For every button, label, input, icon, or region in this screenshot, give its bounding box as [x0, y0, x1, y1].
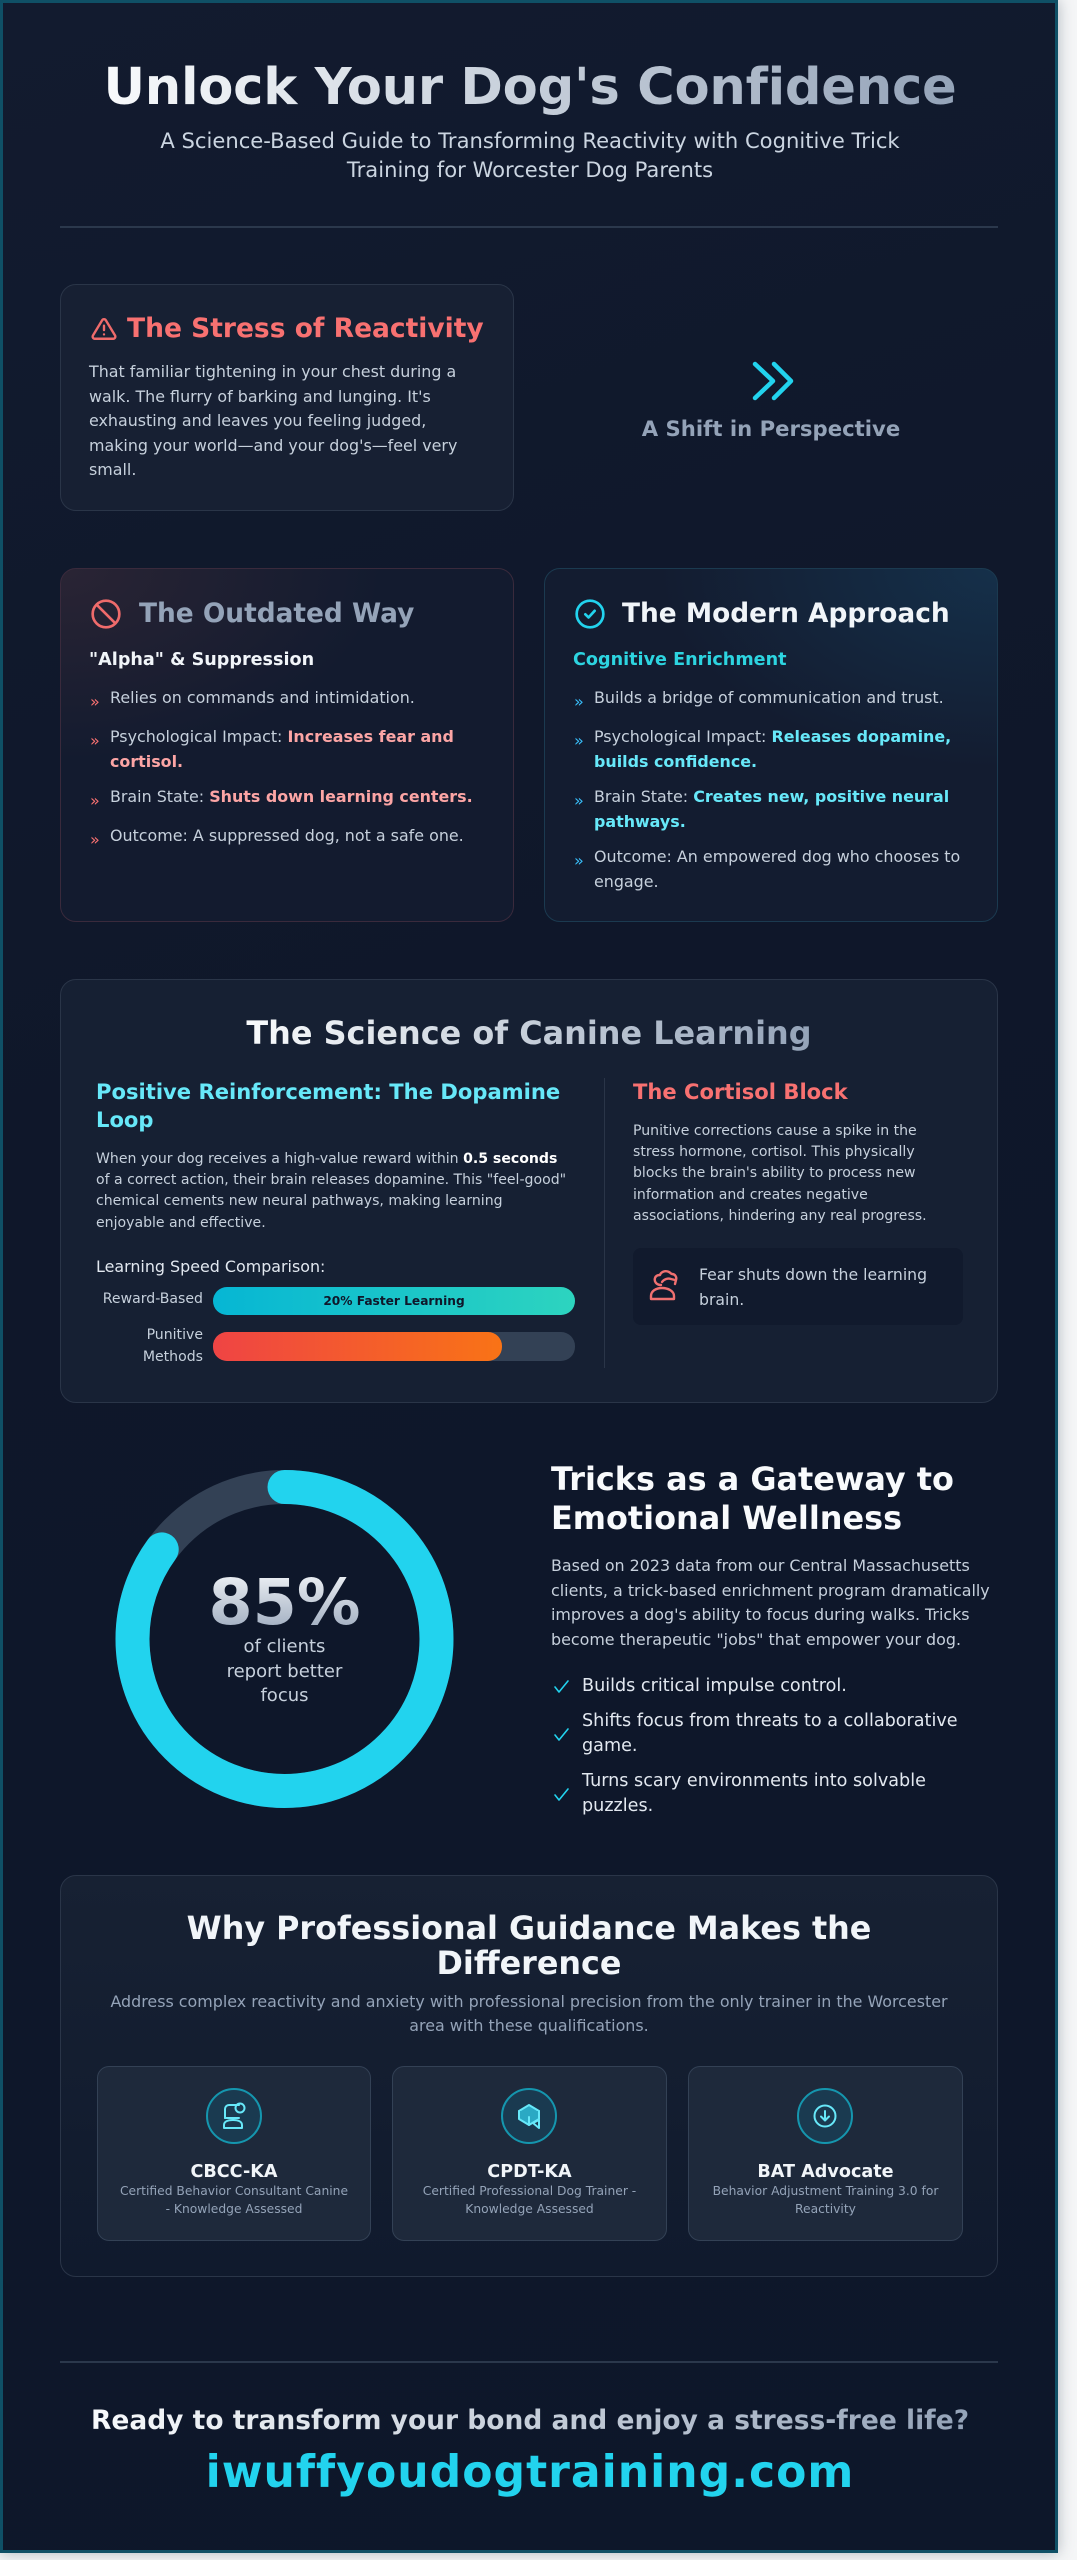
transition: a shift in perspective [642, 362, 900, 441]
description: Certified Behavior Consultant Canine [120, 2184, 348, 2198]
list [90, 688, 473, 849]
heading: Tricks as a Gateway to [551, 1460, 954, 1498]
chart: learning speed comparison [96, 1257, 575, 1364]
body text [88, 362, 457, 479]
callout [633, 1248, 963, 1325]
heading: The Modern Approach [622, 598, 950, 629]
subheading: "Alpha" & Suppression [89, 650, 314, 670]
subheading: Cognitive Enrichment [573, 650, 787, 670]
bullet row: Relies on commands and intimidation. [110, 688, 415, 707]
bar: reward-based: 20% Faster Learning [323, 1294, 465, 1308]
label: A Shift in Perspective [642, 416, 900, 441]
icon badge [501, 2088, 557, 2144]
bullet row: Outcome: An empowered dog who chooses to [594, 846, 960, 866]
left column text: of a correct action, their brain releases dopamine. This "feel-good" [96, 1172, 566, 1188]
callout text [699, 1265, 927, 1309]
heading: Why Professional Guidance Makes the [187, 1910, 871, 1947]
icon badge [797, 2088, 853, 2144]
heading: The Stress of Reactivity [127, 313, 484, 344]
credential: CBCC-KA [96, 2066, 371, 2241]
right column text: blocks the brain's ability to process new [633, 1165, 916, 1181]
list: » [90, 731, 100, 750]
body text: clients, a trick-based enrichment program dramatically [551, 1581, 990, 1600]
left column text: enjoyable and effective. [96, 1215, 266, 1231]
chart: 85% donut [116, 1470, 454, 1808]
icon: check [554, 1728, 569, 1741]
bullet row: Outcome: A suppressed dog, not a safe one. [110, 826, 464, 845]
left column heading: Loop [96, 1107, 154, 1132]
icon badge [206, 2088, 262, 2144]
icon: check circle [575, 599, 605, 629]
left column heading: Positive Reinforcement: The Dopamine [96, 1079, 560, 1104]
heading: Difference [437, 1945, 621, 1982]
label: reward-based: Reward-Based [103, 1291, 203, 1307]
credential: CPDT-KA [392, 2066, 666, 2241]
check item: Builds critical impulse control. [582, 1676, 847, 1696]
list: » [574, 791, 584, 810]
panel: the outdated way [60, 568, 514, 922]
heading [187, 1910, 871, 1982]
bullet row [90, 727, 454, 771]
check item: puzzles. [582, 1796, 653, 1816]
bullet row: builds confidence. [594, 752, 757, 771]
icon: check [554, 1788, 569, 1801]
donut caption: of clients [244, 1636, 325, 1657]
right column text: Punitive corrections cause a spike in the [633, 1123, 917, 1139]
icon: warning triangle [91, 318, 117, 340]
heading: The Outdated Way [139, 598, 414, 629]
list: » [90, 791, 100, 810]
callout text: Fear shuts down the learning [699, 1265, 927, 1284]
description: Knowledge Assessed [465, 2202, 594, 2216]
bullet row: Psychological Impact: Increases fear and [110, 727, 454, 746]
chart title: Learning Speed Comparison: [96, 1257, 325, 1276]
list: » [90, 692, 100, 711]
body text [551, 1556, 990, 1649]
list: » [574, 850, 584, 870]
left column text: chemical cements new neural pathways, making learning [96, 1193, 503, 1209]
subtitle: Training for Worcester Dog Parents [347, 156, 713, 182]
label: punitive methods: Methods [143, 1348, 203, 1364]
left column text: When your dog receives a high-value reward within 0.5 seconds [96, 1151, 557, 1167]
check item [582, 1771, 926, 1816]
icon: prohibited [91, 599, 121, 629]
bullet row: Builds a bridge of communication and trust. [594, 688, 944, 707]
icon: box mark [516, 2101, 544, 2131]
bullet row: Psychological Impact: Releases dopamine, [594, 727, 951, 746]
icon: check [554, 1680, 569, 1693]
bullet row: Brain State: Shuts down learning centers. [110, 787, 473, 806]
description [98, 2183, 370, 2218]
panel: the science of canine learning [60, 979, 998, 1403]
big number: 85% [208, 1565, 360, 1639]
body text: walk. The flurry of barking and lunging. It's [89, 386, 431, 406]
bullet row [574, 846, 960, 890]
donut caption: report better [227, 1661, 342, 1682]
check item: Turns scary environments into solvable [582, 1771, 926, 1791]
bullet row: engage. [594, 872, 659, 890]
body text: That familiar tightening in your chest during a [89, 362, 456, 381]
heading: The Science of Canine Learning [246, 1014, 812, 1052]
left column heading [96, 1079, 560, 1132]
bullet row: pathways. [594, 812, 686, 831]
bullet row [574, 727, 951, 771]
right column text: associations, hindering any real progress. [633, 1208, 927, 1224]
body text: become therapeutic "jobs" that empower your dog. [551, 1630, 961, 1649]
body text: small. [89, 460, 136, 479]
name: BAT Advocate [757, 2162, 894, 2182]
right column text [633, 1123, 927, 1224]
description: - Knowledge Assessed [166, 2202, 302, 2216]
bar fill [213, 1332, 502, 1361]
donut caption [227, 1636, 342, 1706]
description: Behavior Adjustment Training 3.0 for [713, 2184, 938, 2198]
panel: the stress of reactivity [60, 284, 514, 511]
name: CBCC-KA [190, 2162, 278, 2182]
title: Unlock Your Dog's Confidence [103, 57, 957, 117]
body text: Based on 2023 data from our Central Massachusetts [551, 1556, 970, 1575]
bar: punitive methods [213, 1332, 575, 1361]
panel: why professional guidance [60, 1875, 998, 2277]
callout text: brain. [699, 1290, 744, 1309]
icon: user mark [220, 2101, 246, 2131]
list: » [90, 830, 100, 849]
subtitle: A Science-Based Guide to Transforming Reactivity with Cognitive Trick [160, 128, 900, 153]
right column text: information and creates negative [633, 1187, 868, 1203]
heading [551, 1460, 954, 1537]
right column text: stress hormone, cortisol. This physically [633, 1144, 915, 1160]
credential: BAT Advocate [688, 2066, 962, 2241]
bar: reward-based [213, 1287, 575, 1315]
icon: double chevron [752, 362, 794, 400]
bullet row [574, 787, 949, 831]
description [689, 2183, 962, 2218]
call to action: Ready to transform your bond and enjoy a stress-free life? [91, 2405, 969, 2436]
body text: exhausting and leaves you feeling judged, [89, 411, 426, 430]
heading: Emotional Wellness [551, 1499, 902, 1537]
name: CPDT-KA [487, 2162, 572, 2182]
check item: game. [582, 1736, 638, 1756]
icon: brain [650, 1270, 678, 1300]
body text: improves a dog's ability to focus during walks. Tricks [551, 1605, 970, 1624]
donut ring [116, 1470, 454, 1808]
right column heading: The Cortisol Block [633, 1079, 848, 1104]
body text: making your world—and your dog's—feel very [89, 436, 457, 454]
label: punitive methods: Punitive [147, 1327, 203, 1343]
list: » [574, 692, 584, 711]
section: tricks as a gateway [551, 1460, 990, 1816]
list [574, 688, 960, 890]
bullet row: Brain State: Creates new, positive neural [594, 787, 949, 806]
subheading: area with these qualifications. [409, 2016, 649, 2035]
description: Certified Professional Dog Trainer - [423, 2184, 636, 2198]
panel: the modern approach [544, 568, 998, 922]
icon: arrow circle [813, 2104, 837, 2128]
subtitle [160, 128, 900, 182]
left column text [96, 1151, 566, 1231]
description [393, 2183, 666, 2218]
subheading: Address complex reactivity and anxiety with professional precision from the only trainer in the Worcester [110, 1992, 948, 2011]
donut caption: focus [260, 1685, 309, 1706]
website url: iwuffyoudogtraining.com [206, 2447, 854, 2498]
description: Reactivity [795, 2202, 856, 2216]
subheading [110, 1992, 948, 2035]
label: punitive methods [143, 1327, 203, 1364]
list: » [574, 731, 584, 750]
check item: Shifts focus from threats to a collaborative [582, 1711, 958, 1731]
bullet row: cortisol. [110, 752, 183, 771]
check item [582, 1711, 958, 1756]
